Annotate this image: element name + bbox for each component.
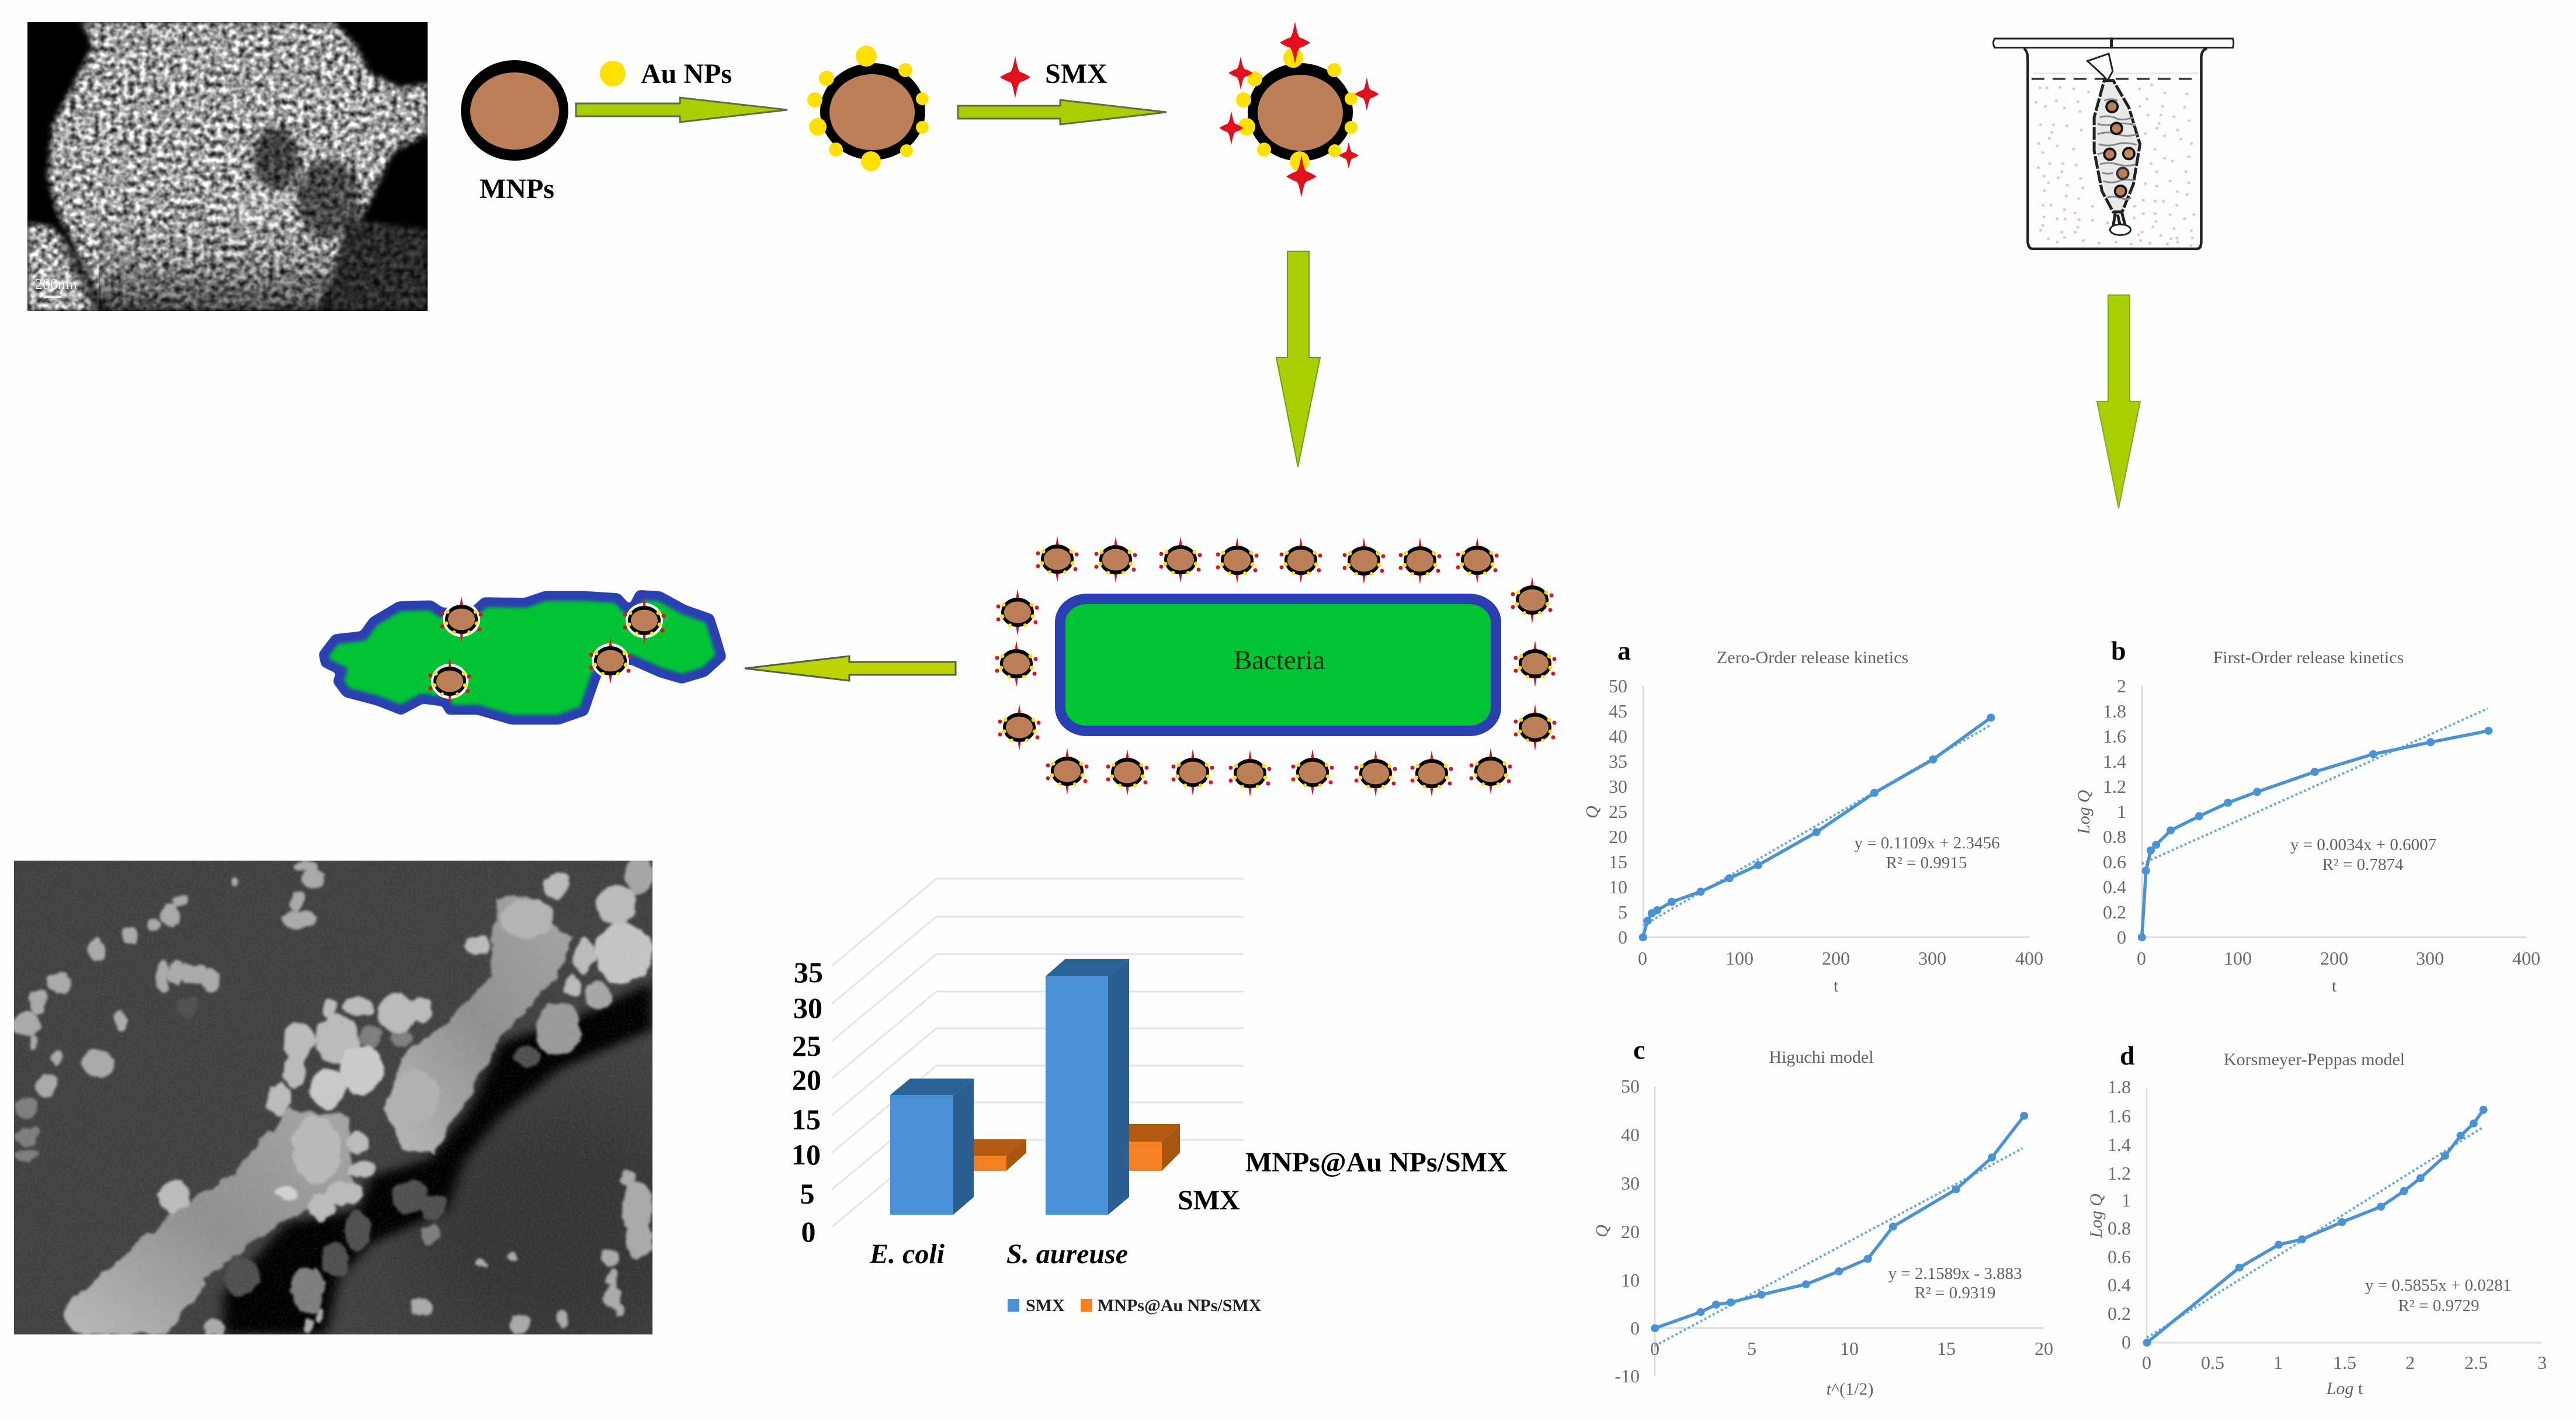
chart b: first-order kinetics: First-Order release kinetics [2213, 648, 2404, 667]
chart d: Korsmeyer-Peppas model: 3 [2537, 1352, 2547, 1373]
chart b: first-order kinetics: 0.6 [2103, 851, 2126, 872]
y-axis values: 5 [800, 1177, 814, 1210]
y-axis values [791, 956, 823, 1248]
legend: SMX [1000, 56, 1108, 98]
y-axis values: 15 [791, 1103, 821, 1136]
chart c: Higuchi model: 5 [1747, 1338, 1756, 1359]
chart b: first-order kinetics: y = 0.0034x + 0.6007 [2290, 835, 2436, 854]
chart c: Higuchi model: c [1633, 1035, 1645, 1065]
arrow: to damaged bacteria [745, 656, 956, 681]
chart d: Korsmeyer-Peppas model: 2.5 [2464, 1352, 2488, 1373]
chart b: first-order kinetics: 0.2 [2103, 902, 2126, 923]
chart a: zero-order kinetics: 100 [1726, 948, 1754, 969]
chart b: first-order kinetics: 2 [2117, 675, 2126, 696]
bars: SMX [890, 959, 1129, 1215]
chart d: Korsmeyer-Peppas model [2087, 1041, 2547, 1398]
chart c: Higuchi model [1592, 1035, 2053, 1399]
chart a: zero-order kinetics: 0 [1638, 948, 1647, 969]
chart d: Korsmeyer-Peppas model: 1.2 [2108, 1163, 2131, 1184]
chart c: Higuchi model: -10 [1615, 1365, 1640, 1386]
chart c: Higuchi model: t^(1/2) [1827, 1379, 1873, 1399]
chart a: zero-order kinetics: 30 [1609, 776, 1627, 797]
chart a: zero-order kinetics: t [1834, 976, 1839, 996]
chart a: zero-order kinetics: 35 [1609, 751, 1627, 772]
arrow: down to kinetics charts [2097, 295, 2140, 508]
chart b: first-order kinetics: 1.8 [2103, 701, 2126, 722]
chart b: first-order kinetics: 0.4 [2103, 876, 2126, 897]
chart a: zero-order kinetics: 50 [1609, 675, 1627, 696]
chart a: zero-order kinetics: 200 [1822, 948, 1850, 969]
depth-axis labels: SMX [1178, 1185, 1240, 1216]
chart c: Higuchi model: 0 [1630, 1318, 1640, 1339]
chart c: Higuchi model: 50 [1621, 1076, 1640, 1097]
chart b: first-order kinetics: t [2332, 976, 2337, 996]
chart d: Korsmeyer-Peppas model: 1.5 [2333, 1352, 2356, 1373]
beaker with dialysis bag [1994, 37, 2234, 249]
chart c: Higuchi model: y = 2.1589x - 3.883 [1888, 1264, 2022, 1283]
chart d: Korsmeyer-Peppas model: Korsmeyer-Peppas model [2224, 1050, 2405, 1069]
chart a: zero-order kinetics: R² = 0.9915 [1886, 854, 1967, 872]
chart a: zero-order kinetics: 45 [1609, 701, 1627, 722]
chart d: Korsmeyer-Peppas model: y = 0.5855x + 0.0281 [2365, 1276, 2511, 1295]
bars: MNPs@Au NPs/SMX [952, 1124, 1180, 1171]
legend: SMX: SMX [1045, 58, 1108, 89]
nanoparticle ring [995, 536, 1556, 797]
chart d: Korsmeyer-Peppas model: d [2120, 1041, 2135, 1070]
chart d: Korsmeyer-Peppas model: Log Q [2087, 1194, 2106, 1239]
particle decorated with Au NPs [807, 46, 929, 171]
chart d: Korsmeyer-Peppas model: 0.4 [2108, 1274, 2131, 1295]
chart b: first-order kinetics: 1.4 [2103, 751, 2126, 772]
chart a: zero-order kinetics: 10 [1609, 876, 1627, 897]
chart d: Korsmeyer-Peppas model: 0.6 [2108, 1246, 2131, 1267]
dialysis bag [2088, 54, 2140, 235]
chart a: zero-order kinetics: 0 [1618, 927, 1627, 948]
chart a: zero-order kinetics: 40 [1609, 726, 1627, 747]
chart c: Higuchi model: 30 [1621, 1173, 1640, 1194]
damaged bacteria cell [324, 595, 721, 720]
arrow: down to bacteria [1276, 251, 1320, 467]
chart a: zero-order kinetics: 25 [1609, 801, 1627, 822]
intact bacteria cell: Bacteria [1234, 645, 1325, 675]
legend: Au NPs: Au NPs [641, 58, 732, 89]
chart d: Korsmeyer-Peppas model: 1.4 [2108, 1134, 2131, 1155]
chart b: first-order kinetics: 100 [2224, 948, 2252, 969]
chart b: first-order kinetics: 300 [2416, 948, 2444, 969]
chart c: Higuchi model: Q [1592, 1225, 1612, 1237]
chart c: Higuchi model: Higuchi model [1769, 1048, 1874, 1067]
chart d: Korsmeyer-Peppas model: 1.6 [2108, 1105, 2131, 1126]
chart legend: MNPs@Au NPs/SMX [1098, 1296, 1262, 1315]
3D chart grid [832, 879, 1244, 1227]
chart d: Korsmeyer-Peppas model: 0.5 [2201, 1352, 2224, 1373]
chart b: first-order kinetics: 0 [2117, 927, 2126, 948]
chart b: first-order kinetics: b [2111, 636, 2126, 665]
chart legend [1008, 1296, 1262, 1315]
rod cell: lower segment [63, 1110, 353, 1334]
y-axis values: 20 [792, 1063, 821, 1096]
chart c: Higuchi model: 10 [1621, 1270, 1640, 1291]
chart d: Korsmeyer-Peppas model: 0 [2122, 1332, 2131, 1353]
chart c: Higuchi model: 0 [1650, 1338, 1660, 1359]
particle loaded with SMX [1219, 22, 1379, 197]
chart d: Korsmeyer-Peppas model: 2 [2405, 1352, 2415, 1373]
chart d: Korsmeyer-Peppas model: 1 [2122, 1190, 2131, 1211]
chart c: Higuchi model: 15 [1937, 1338, 1956, 1359]
chart c: Higuchi model: 20 [1621, 1221, 1640, 1242]
y-axis values: 25 [792, 1029, 821, 1062]
chart c: Higuchi model: 10 [1840, 1338, 1859, 1359]
intact bacteria cell [1060, 599, 1496, 731]
grains and clusters [13, 861, 652, 1336]
chart a: zero-order kinetics [1582, 636, 2043, 996]
chart c: Higuchi model: 20 [2035, 1338, 2053, 1359]
chart a: zero-order kinetics: 300 [1918, 948, 1946, 969]
chart b: first-order kinetics: 0.8 [2103, 826, 2126, 847]
SEM scale label: 200nm [35, 276, 77, 293]
arrow: Au NPs to SMX [958, 100, 1167, 124]
chart d: Korsmeyer-Peppas model: Log t [2326, 1379, 2363, 1398]
chart a: zero-order kinetics: Q [1582, 806, 1602, 819]
chart d: Korsmeyer-Peppas model: 0.8 [2108, 1218, 2131, 1239]
arrow: MNPs to Au NPs [576, 98, 787, 122]
y-axis values: 35 [794, 956, 823, 989]
chart b: first-order kinetics: 0 [2137, 948, 2146, 969]
SEM image: particles on bacterium [14, 861, 652, 1334]
chart a: zero-order kinetics: a [1617, 636, 1631, 665]
bacteria surrounded by nanoparticles [995, 536, 1556, 797]
chart b: first-order kinetics: Log Q [2074, 790, 2094, 835]
chart b: first-order kinetics: R² = 0.7874 [2322, 855, 2404, 874]
y-axis values: 30 [793, 991, 822, 1024]
chart a: zero-order kinetics: 400 [2015, 948, 2043, 969]
chart c: Higuchi model: R² = 0.9319 [1915, 1284, 1995, 1302]
MNPs particle [461, 60, 568, 161]
chart d: Korsmeyer-Peppas model: 1 [2273, 1352, 2283, 1373]
chart b: first-order kinetics [2074, 636, 2540, 996]
legend: Au NPs [600, 58, 732, 89]
chart a: zero-order kinetics: 5 [1618, 902, 1627, 923]
SEM image: MNPs@Au NPs/SMX [27, 22, 429, 311]
chart legend: SMX [1026, 1296, 1065, 1315]
bar chart: antibacterial activity [791, 879, 1508, 1315]
chart d: Korsmeyer-Peppas model: 0.2 [2108, 1303, 2131, 1324]
chart b: first-order kinetics: 1.6 [2103, 726, 2126, 747]
category labels [869, 1239, 1128, 1270]
chart b: first-order kinetics: 200 [2320, 948, 2348, 969]
chart d: Korsmeyer-Peppas model: R² = 0.9729 [2398, 1296, 2479, 1315]
chart a: zero-order kinetics: Zero-Order release kinetics [1717, 648, 1908, 667]
label: MNPs: MNPs [480, 174, 554, 204]
chart a: zero-order kinetics: 15 [1609, 851, 1627, 872]
chart c: Higuchi model: 40 [1621, 1124, 1640, 1145]
depth-axis labels [1178, 1147, 1508, 1216]
depth-axis labels: MNPs@Au NPs/SMX [1245, 1147, 1508, 1178]
chart b: first-order kinetics: 1.2 [2103, 776, 2126, 797]
category labels: S. aureuse [1006, 1239, 1128, 1270]
chart a: zero-order kinetics: 20 [1609, 826, 1627, 847]
y-axis values: 10 [791, 1138, 821, 1171]
y-axis values: 0 [801, 1215, 815, 1248]
pink SMX dots in release medium [2035, 84, 2196, 247]
chart d: Korsmeyer-Peppas model: 1.8 [2108, 1076, 2131, 1097]
chart a: zero-order kinetics: y = 0.1109x + 2.3456 [1854, 834, 2000, 852]
rod cell: upper segment [384, 895, 572, 1153]
chart d: Korsmeyer-Peppas model: 0 [2142, 1352, 2151, 1373]
category labels: E. coli [869, 1239, 945, 1270]
chart b: first-order kinetics: 400 [2512, 948, 2540, 969]
chart b: first-order kinetics: 1 [2117, 801, 2126, 822]
